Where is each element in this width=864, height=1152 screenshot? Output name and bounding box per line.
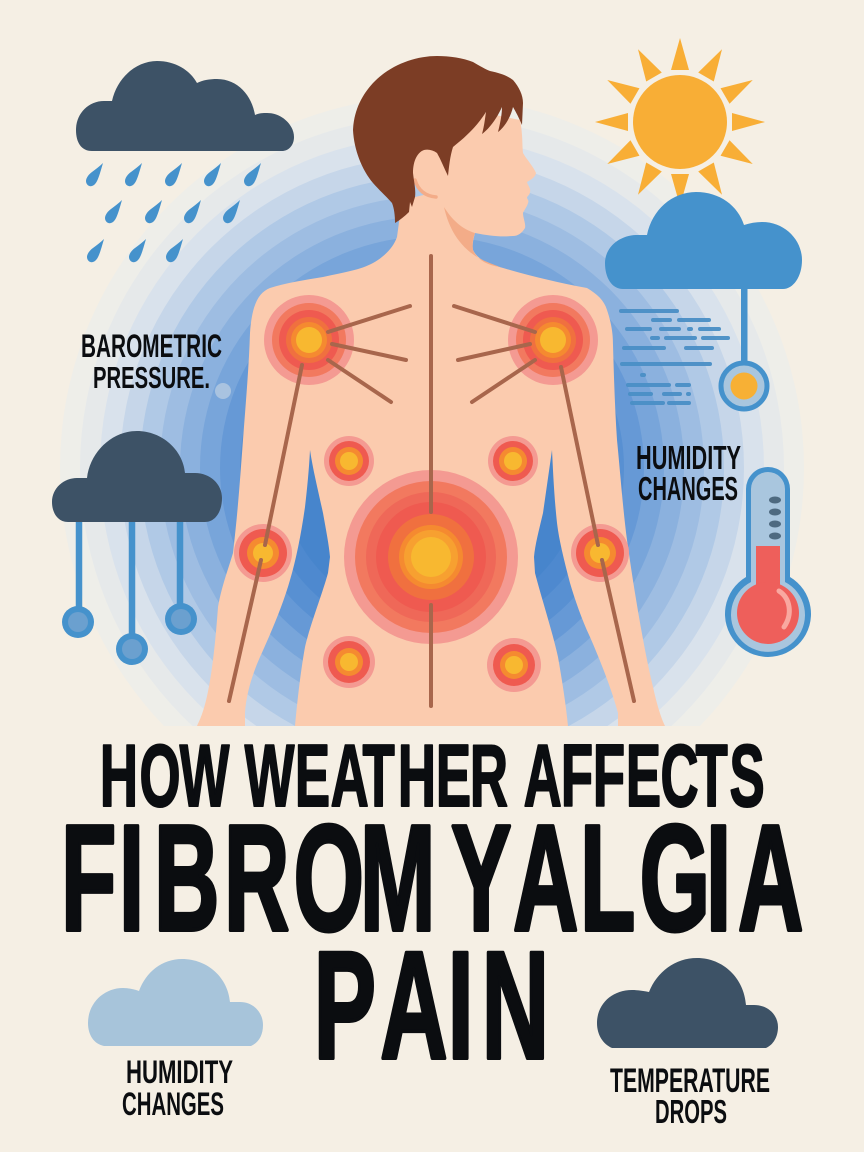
icon: rain cloud (76, 61, 294, 151)
human figure (197, 56, 665, 726)
label: humidity changes bottom: CHANGES (122, 1086, 224, 1122)
neck shadow (444, 207, 500, 267)
label: humidity changes right (636, 439, 741, 507)
label: barometric pressure: PRESSURE. (93, 360, 210, 395)
pain spot: left elbow (234, 524, 292, 582)
label: humidity changes bottom: HUMIDITY (126, 1054, 233, 1090)
icon: storm cloud with pressure gauges (52, 431, 222, 665)
icon: blue cloud with gauge (605, 192, 802, 409)
pain spot: abdomen centre (344, 470, 518, 644)
icon: raindrops (86, 163, 261, 262)
icon: sun (595, 38, 765, 206)
pain spot: left shoulder (264, 295, 354, 385)
hair (353, 56, 523, 223)
ear (407, 144, 449, 200)
title: FIBROMYALGIA (61, 794, 803, 963)
icon: humidity wind dashes (621, 311, 728, 403)
title: HOW WEATHER AFFECTS (100, 727, 765, 825)
title: PAIN (314, 919, 549, 1091)
label: temperature drops: TEMPERATURE (610, 1062, 770, 1100)
concentric blue halo (80, 125, 784, 726)
label: barometric pressure (81, 328, 222, 395)
pain spot: lower left (323, 636, 375, 688)
pain spot: right chest (488, 436, 538, 486)
label: humidity changes right: CHANGES (638, 470, 738, 507)
icon: dark cloud (597, 958, 778, 1048)
pain spot: left chest (324, 436, 374, 486)
label: temperature drops: DROPS (655, 1093, 727, 1130)
label: temperature drops (610, 1062, 770, 1130)
label: barometric pressure: BAROMETRIC (81, 328, 222, 364)
pain spot: right elbow (571, 524, 629, 582)
body silhouette (197, 190, 665, 726)
icon: thermometer (725, 467, 811, 657)
pain spot: lower right (487, 638, 541, 692)
pain spot: right shoulder (508, 295, 598, 385)
nerve lines (229, 256, 634, 706)
ear shadow (415, 180, 436, 197)
face (420, 110, 536, 236)
label: humidity changes right: HUMIDITY (636, 439, 741, 476)
label: humidity changes bottom (122, 1054, 233, 1122)
icon: light cloud (88, 959, 263, 1046)
title (61, 727, 803, 1091)
decorative bubble (215, 383, 231, 399)
